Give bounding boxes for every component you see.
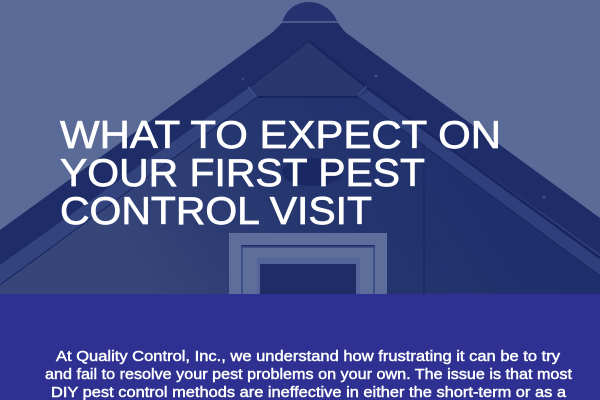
dome cap ledge (282, 21, 338, 23)
roof bolts (242, 75, 545, 244)
title: CONTROL VISIT (60, 190, 372, 233)
roof trim band right (358, 90, 600, 276)
window glass (260, 264, 356, 294)
window frame (229, 233, 387, 294)
dome cap at roof peak (273, 2, 345, 45)
sky background (0, 0, 600, 294)
panel: intro (0, 294, 600, 400)
attic vent (282, 158, 342, 186)
gable shadow lines (0, 41, 600, 294)
upper gable triangle (250, 41, 370, 97)
dark roof fascia (0, 23, 600, 294)
title (60, 114, 501, 233)
gable wall (0, 41, 600, 294)
roof trim band left (0, 87, 257, 285)
intro text block (45, 349, 572, 400)
intro text block: and fail to resolve your pest problems on your own. The issue is that most (45, 367, 572, 383)
hero photo: house gable tinted blue (0, 0, 600, 294)
title: YOUR FIRST PEST (60, 152, 425, 195)
intro text block: At Quality Control, Inc., we understand how frustrating it can be to try (56, 349, 561, 365)
title: WHAT TO EXPECT ON (60, 114, 501, 157)
